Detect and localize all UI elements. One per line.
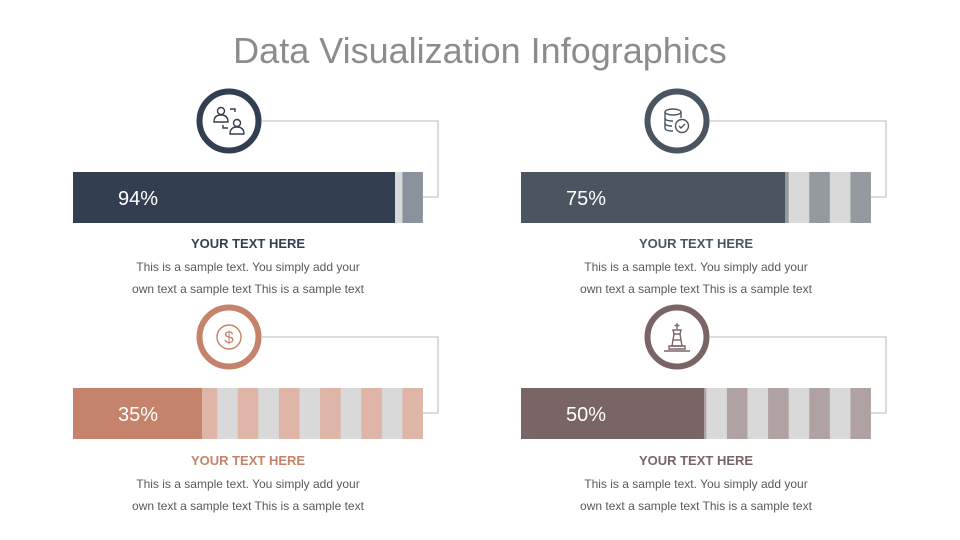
panel: top-left 94% (73, 92, 438, 296)
body text (580, 477, 813, 513)
body text: own text a sample text This is a sample text (580, 499, 813, 513)
heading: YOUR TEXT HERE (639, 236, 753, 251)
panel: bottom-left 35% (73, 308, 438, 513)
heading: YOUR TEXT HERE (639, 453, 753, 468)
body text (132, 477, 365, 513)
body text: own text a sample text This is a sample text (580, 282, 813, 296)
value 50%: 50% (566, 404, 606, 426)
value 94%: 94% (118, 188, 158, 210)
icon: people exchange (200, 92, 258, 150)
heading: YOUR TEXT HERE (191, 453, 305, 468)
heading: YOUR TEXT HERE (191, 236, 305, 251)
icon: chess king (648, 308, 706, 366)
bar fill 94% (73, 172, 395, 223)
body text: This is a sample text. You simply add your (584, 260, 808, 274)
body text (580, 260, 813, 296)
icon: database check (648, 92, 706, 150)
body text: own text a sample text This is a sample text (132, 499, 365, 513)
panel: bottom-right 50% (521, 308, 886, 513)
bar fill 35% (73, 388, 202, 439)
icon: dollar: $ (224, 328, 234, 347)
body text: This is a sample text. You simply add your (136, 260, 360, 274)
value 35%: 35% (118, 404, 158, 426)
body text: This is a sample text. You simply add your (584, 477, 808, 491)
icon: dollar (200, 308, 258, 366)
bar fill 75% (521, 172, 785, 223)
body text: This is a sample text. You simply add your (136, 477, 360, 491)
body text: own text a sample text This is a sample text (132, 282, 365, 296)
panel: top-right 75% (521, 92, 886, 296)
value 75%: 75% (566, 188, 606, 210)
title: Data Visualization Infographics (233, 30, 727, 71)
bar fill 50% (521, 388, 704, 439)
body text (132, 260, 365, 296)
